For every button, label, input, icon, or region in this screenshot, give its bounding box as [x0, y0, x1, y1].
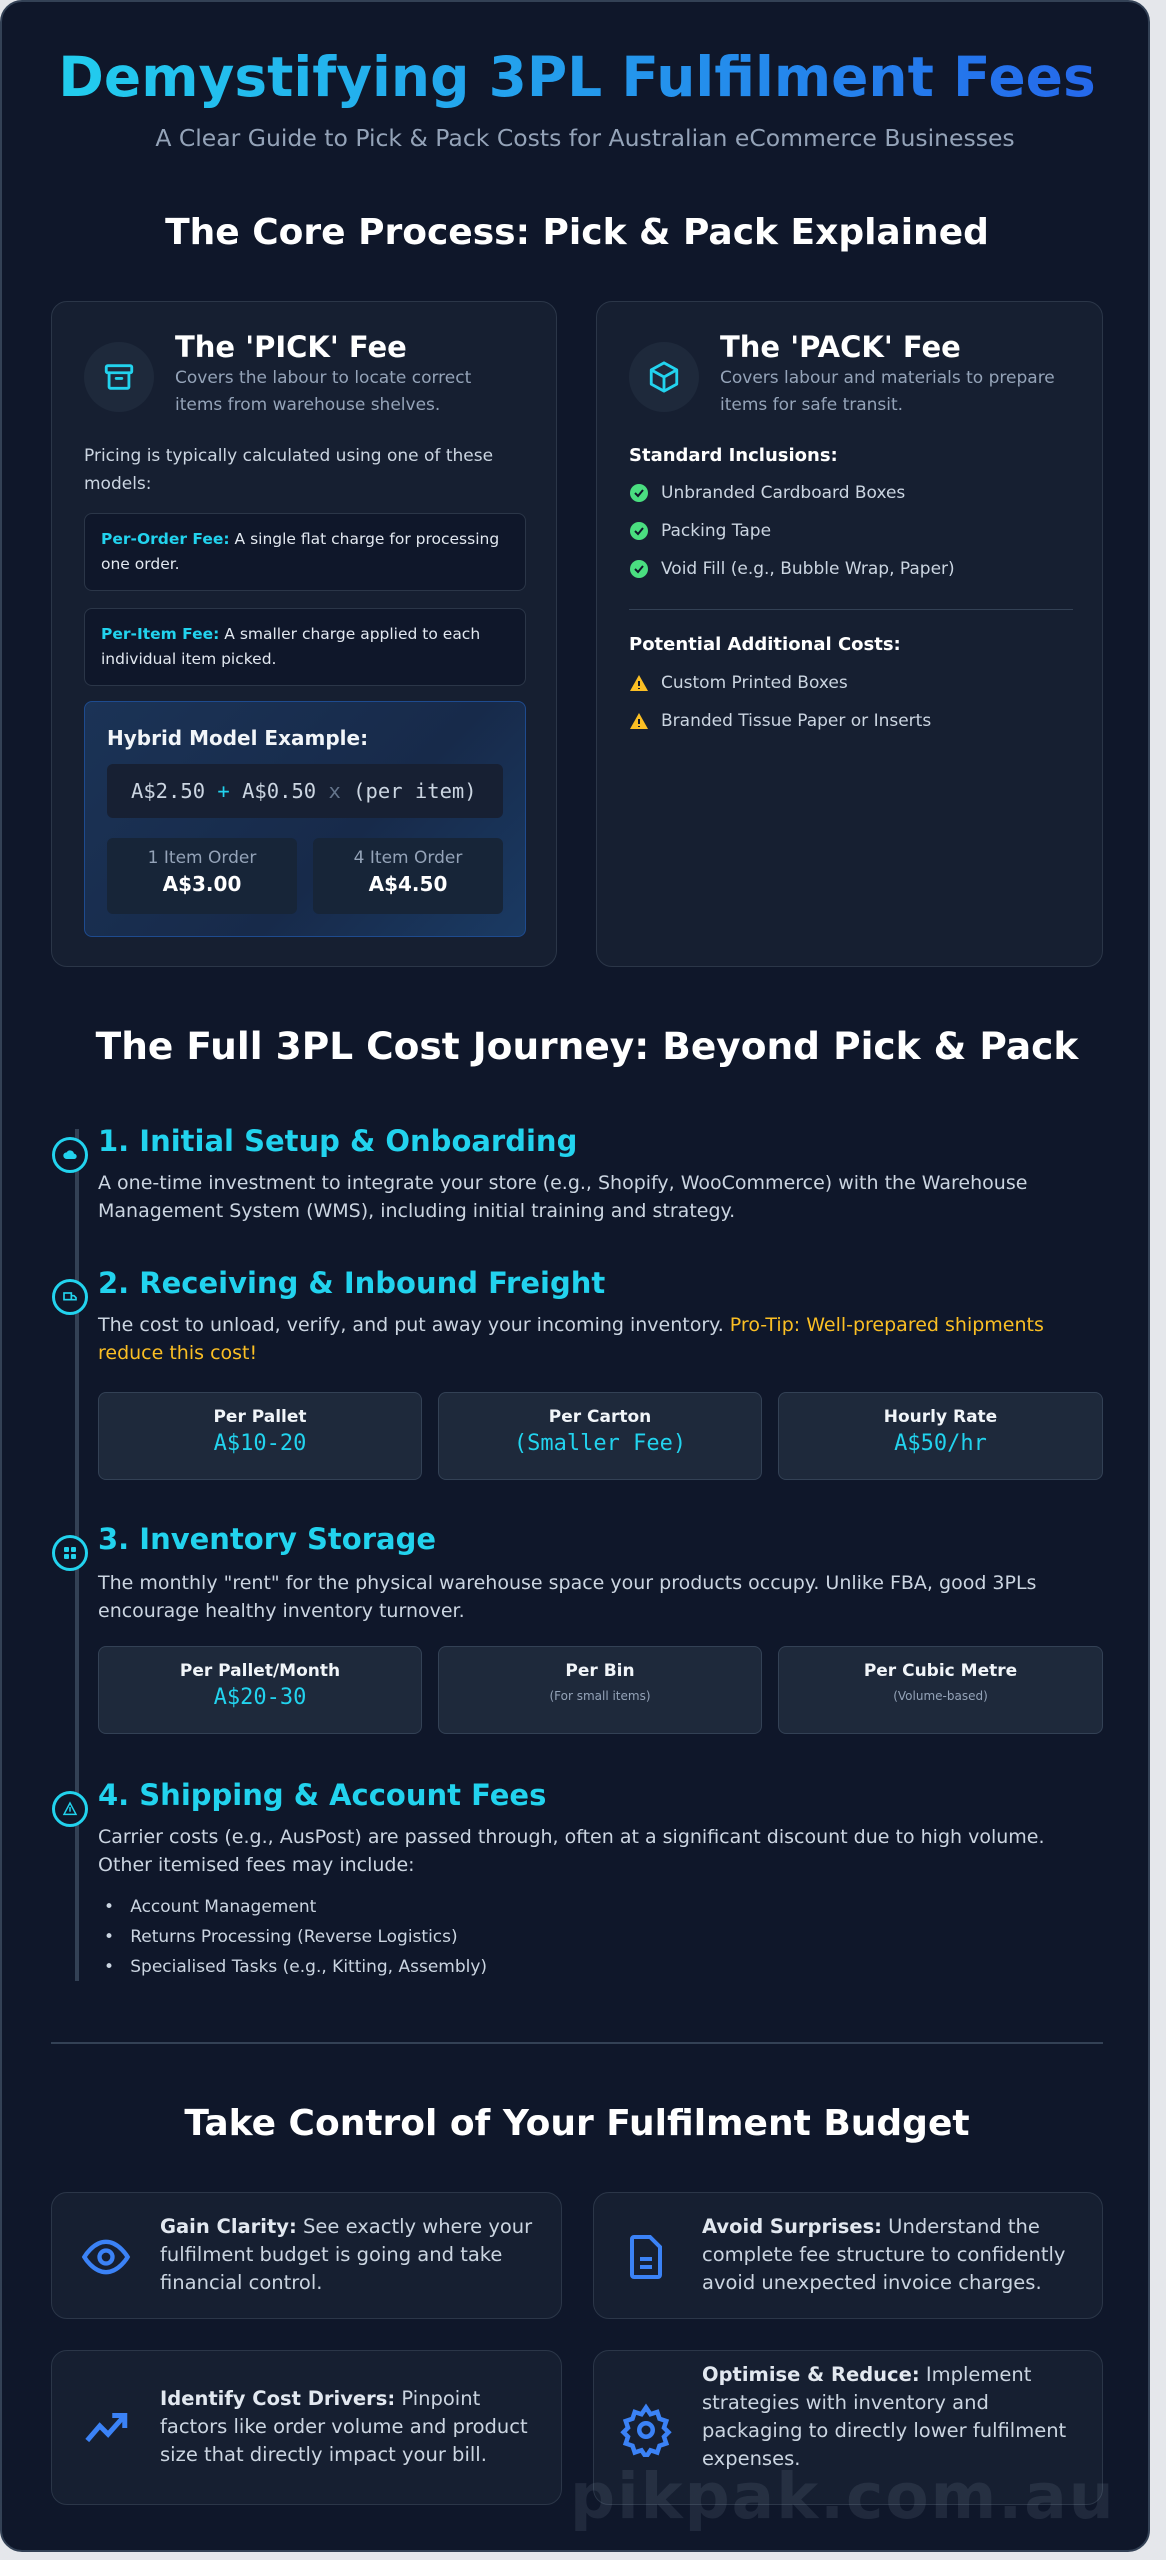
step 3: 3. Inventory Storage: [98, 1522, 436, 1556]
step 1: A one-time investment to integrate your store (e.g., Shopify, WooCommerce) with the Warehouse: [98, 1172, 1027, 1194]
step 2: Per Carton: [549, 1407, 651, 1427]
step 2: A$50/hr: [894, 1431, 987, 1456]
inclusion list: Packing Tape: [661, 521, 771, 541]
formula: [107, 764, 503, 818]
card: gain clarity: [51, 2192, 562, 2319]
per-order box: [84, 513, 526, 591]
standard inclusions: Standard Inclusions:: [629, 445, 838, 466]
card: cost drivers: Identify Cost Drivers: Pinpoint: [160, 2387, 480, 2410]
card: optimise: packaging to directly lower fulfilment expenses.: [702, 2419, 1066, 2470]
watermark: pikpak.com.au: [570, 2460, 1116, 2533]
heading: core process: The Core Process: Pick & Pack Explained: [165, 212, 989, 253]
card: avoid surprises: [593, 2192, 1103, 2319]
step 1: Management System (WMS), including initial training and strategy.: [98, 1200, 735, 1222]
additional costs: Potential Additional Costs:: [629, 634, 901, 655]
4 item order: [313, 838, 503, 914]
step 3: Per Cubic Metre: [864, 1661, 1017, 1681]
card: avoid surprises: Avoid Surprises: Understand the complete fee structure to confidently avoid unexpected invoice charges.: [702, 2215, 1065, 2294]
pricing intro: models:: [84, 474, 152, 494]
heading: cost journey: The Full 3PL Cost Journey: Beyond Pick & Pack: [96, 1024, 1078, 1068]
fee boxes: A$10-20: [214, 1431, 306, 1456]
title: Demystifying 3PL Fulfilment Fees: [58, 45, 1096, 109]
step 3: The monthly "rent" for the physical warehouse space your products occupy. Unlike FBA, good 3PLs: [98, 1572, 1036, 1594]
fee boxes: [98, 1392, 422, 1480]
pack heading: The 'PACK' Fee: [720, 330, 961, 364]
pricing intro: [84, 446, 493, 494]
step 2: Hourly Rate: [884, 1407, 997, 1427]
step 3: (Volume-based): [893, 1689, 988, 1703]
icon: document: [630, 2235, 662, 2279]
icon: archive: [84, 342, 154, 412]
pick description: items from warehouse shelves.: [175, 395, 440, 415]
step 1: 1. Initial Setup & Onboarding: [98, 1124, 577, 1158]
1 item order: 1 Item Order: [148, 848, 256, 868]
4 item order: 4 Item Order: [354, 848, 462, 868]
storage boxes: A$20-30: [214, 1685, 306, 1710]
inclusion list: Unbranded Cardboard Boxes: [661, 483, 905, 503]
bullet list: • Specialised Tasks (e.g., Kitting, Assembly): [104, 1957, 487, 1977]
inclusion list: Void Fill (e.g., Bubble Wrap, Paper): [661, 559, 955, 579]
pricing intro: Pricing is typically calculated using one of these: [84, 446, 493, 466]
step 3: (For small items): [549, 1689, 651, 1703]
bullet list: • Returns Processing (Reverse Logistics): [104, 1927, 458, 1947]
additional list: [630, 673, 931, 731]
pack description: items for safe transit.: [720, 395, 903, 415]
hybrid example: Hybrid Model Example:: [107, 726, 368, 750]
icon: gear: [620, 2404, 672, 2457]
step 3: encourage healthy inventory turnover.: [98, 1600, 465, 1622]
step 2: (Smaller Fee): [514, 1431, 686, 1456]
hybrid example: [84, 701, 526, 937]
step 2: reduce this cost!: [98, 1342, 257, 1364]
step 4: [52, 1778, 1045, 1977]
1 item order: [107, 838, 297, 914]
panel: pick fee: [51, 301, 557, 967]
card: optimise: strategies with inventory and: [702, 2391, 989, 2414]
per-order box: Per-Order Fee: A single flat charge for processing one order.: [101, 530, 499, 573]
additional list: Custom Printed Boxes: [661, 673, 848, 693]
bullet list: [104, 1897, 487, 1977]
panel: pack fee: [596, 301, 1103, 967]
per-item box: Per-Item Fee: A smaller charge applied to each individual item picked.: [101, 625, 480, 668]
pack description: Covers labour and materials to prepare: [720, 368, 1055, 388]
step 3: [52, 1522, 1103, 1734]
icon: box: [629, 342, 699, 412]
step 4: Other itemised fees may include:: [98, 1854, 415, 1876]
step 2: 2. Receiving & Inbound Freight: [98, 1266, 605, 1300]
icon: trending up: [85, 2413, 128, 2442]
step 1: [52, 1124, 1027, 1222]
bullet list: • Account Management: [104, 1897, 316, 1917]
step 2: [52, 1266, 1103, 1480]
icon: cloud: [52, 1137, 88, 1173]
icon: grid: [52, 1535, 88, 1571]
icon: truck: [52, 1279, 88, 1315]
step 3: Per Bin: [565, 1661, 635, 1681]
pick description: [175, 368, 471, 415]
step 4: Carrier costs (e.g., AusPost) are passed through, often at a significant discount due to high volume.: [98, 1826, 1045, 1848]
card: cost drivers: [51, 2350, 562, 2505]
timeline line: [75, 1129, 79, 1981]
card: optimise: [593, 2350, 1103, 2505]
pick heading: The 'PICK' Fee: [175, 330, 407, 364]
card: cost drivers: factors like order volume and product size that directly impact your bill.: [160, 2415, 528, 2466]
card: gain clarity: Gain Clarity: See exactly where your fulfilment budget is going and take financial control.: [160, 2215, 532, 2294]
heading: take control: Take Control of Your Fulfilment Budget: [184, 2103, 970, 2144]
card: optimise: Optimise & Reduce: Implement: [702, 2363, 1031, 2386]
icon: send: [52, 1791, 88, 1827]
subtitle: A Clear Guide to Pick & Pack Costs for Australian eCommerce Businesses: [155, 124, 1015, 152]
4 item order: A$4.50: [369, 872, 447, 896]
icon: eye: [82, 2240, 130, 2274]
step 2: The cost to unload, verify, and put away your incoming inventory. Pro-Tip: Well-prepared shipments: [98, 1314, 1044, 1336]
1 item order: A$3.00: [163, 872, 241, 896]
step 4: 4. Shipping & Account Fees: [98, 1778, 546, 1812]
formula: A$2.50 + A$0.50 x (per item): [131, 779, 477, 803]
fee boxes: Per Pallet: [213, 1407, 307, 1427]
pick description: Covers the labour to locate correct: [175, 368, 471, 388]
inclusion list: [630, 483, 955, 579]
additional list: Branded Tissue Paper or Inserts: [661, 711, 931, 731]
storage boxes: Per Pallet/Month: [180, 1661, 340, 1681]
per-item box: [84, 608, 526, 686]
pack description: [720, 368, 1055, 415]
storage boxes: [98, 1646, 422, 1734]
